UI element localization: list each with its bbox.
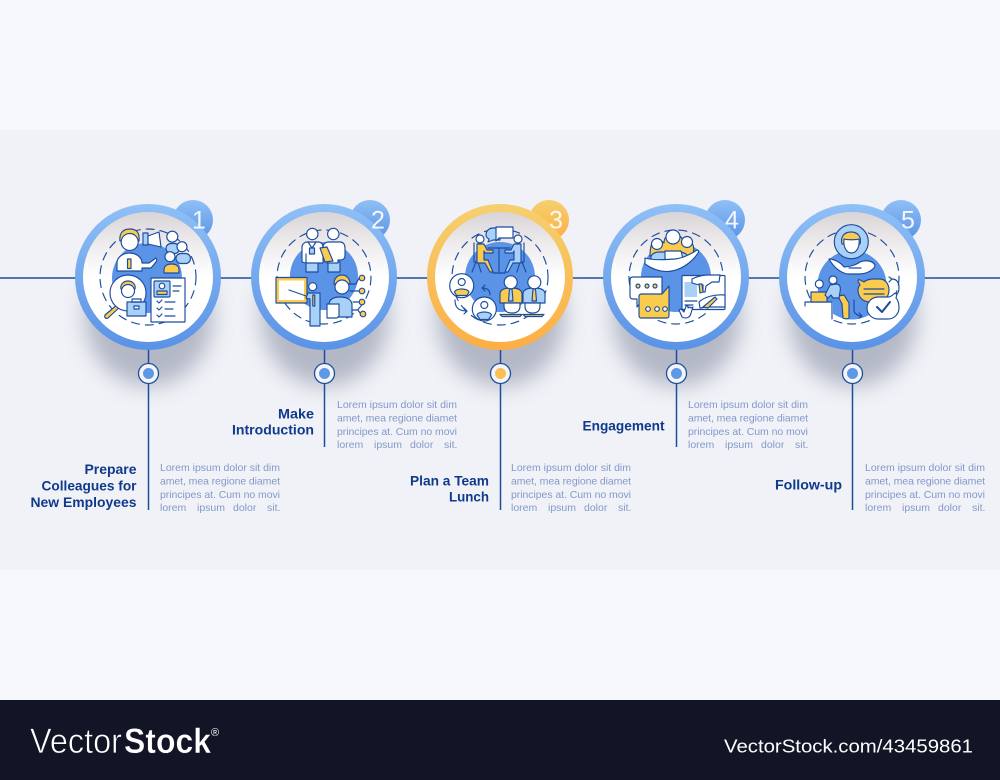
step 1 text: lorem [160, 502, 187, 514]
footer bar [0, 700, 1000, 780]
footer logo [30, 722, 219, 761]
step 3 text: principes at. Cum no movi [511, 489, 631, 501]
step 5 heading: Follow-up [775, 476, 842, 492]
step 2 text: sit. [444, 439, 457, 451]
icon: colleagues and hiring [100, 229, 196, 325]
step 4 heading: Engagement [582, 418, 665, 434]
step 1 heading: New Employees [30, 494, 137, 510]
step 2 heading [232, 406, 314, 438]
step 4 connector [676, 345, 678, 447]
step 5 shadow [789, 246, 917, 386]
step 5 inner disc [787, 212, 917, 342]
step 5 connector [852, 345, 854, 510]
step 4 [582, 200, 808, 451]
step 3 number badge [529, 200, 569, 240]
step 1 text: amet, mea regione diamet [160, 476, 280, 488]
step 2 number badge [350, 200, 390, 240]
step 3 number: 3 [549, 206, 563, 234]
step 4 number badge [705, 200, 745, 240]
step 4 text: principes at. Cum no movi [688, 426, 808, 438]
step 4 text: sit. [795, 439, 808, 451]
step 3 text: sit. [618, 502, 631, 514]
step 5 text [865, 462, 985, 514]
step 4 text: lorem [688, 439, 715, 451]
step 3 text: Lorem ipsum dolor sit dim [511, 462, 631, 474]
step 5 text: dolor [938, 502, 962, 514]
step 1 text: Lorem ipsum dolor sit dim [160, 462, 280, 474]
step 2 text: principes at. Cum no movi [337, 426, 457, 438]
step 4 number: 4 [725, 206, 739, 234]
step 2 text: ipsum [374, 439, 402, 451]
step 3 heading [410, 472, 489, 504]
step 1 number badge [173, 200, 213, 240]
step 5 text: ipsum [902, 502, 930, 514]
step 2 text: Lorem ipsum dolor sit dim [337, 399, 457, 411]
step 3 heading: Lunch [449, 488, 489, 504]
step 5 number badge [881, 200, 921, 240]
step 4 ring [603, 204, 749, 350]
step 3 connector [500, 345, 502, 510]
step 1 heading [30, 461, 137, 510]
step 5 text: principes at. Cum no movi [865, 489, 985, 501]
step 1 text: dolor [233, 502, 257, 514]
step 1 heading: Colleagues for [42, 478, 137, 494]
horizontal timeline [0, 277, 1000, 279]
step 3 text: dolor [584, 502, 608, 514]
step 4 text [688, 399, 808, 451]
step 1 text: sit. [267, 502, 280, 514]
step 3 [410, 200, 631, 514]
step 3 shadow [437, 246, 565, 386]
step 1 connector [148, 345, 150, 510]
footer image id: VectorStock.com/43459861 [724, 736, 973, 756]
step 1 node [138, 364, 158, 384]
footer logo: Stock [124, 722, 211, 761]
step 1 shadow [85, 246, 213, 386]
step 2 [232, 200, 457, 451]
step 4 text: ipsum [725, 439, 753, 451]
icon: team lunch [450, 227, 548, 325]
step 2 text: dolor [410, 439, 434, 451]
step 1 number: 1 [192, 206, 206, 234]
icon: engagement [629, 230, 725, 324]
icon: follow-up [805, 225, 899, 324]
step 3 inner disc [435, 212, 565, 342]
step 4 text: Lorem ipsum dolor sit dim [688, 399, 808, 411]
step 5 text: sit. [972, 502, 985, 514]
step 1 text: ipsum [197, 502, 225, 514]
step 1 text: principes at. Cum no movi [160, 489, 280, 501]
step 2 number: 2 [371, 206, 385, 234]
step 4 text: dolor [761, 439, 785, 451]
step 5 text: Lorem ipsum dolor sit dim [865, 462, 985, 474]
step 3 text [511, 462, 631, 514]
step 3 text: amet, mea regione diamet [511, 476, 631, 488]
step 5 node [842, 364, 862, 384]
step 2 text: amet, mea regione diamet [337, 412, 457, 424]
step 3 text: ipsum [548, 502, 576, 514]
step 1 ring [75, 204, 221, 350]
step 3 ring [427, 204, 573, 350]
step 1 inner disc [83, 212, 213, 342]
step 2 text: lorem [337, 439, 364, 451]
step 3 node [490, 364, 510, 384]
step 2 shadow [261, 246, 389, 386]
step 2 heading: Introduction [232, 422, 314, 438]
main band [0, 130, 1000, 570]
step 2 text [337, 399, 457, 451]
step 2 inner disc [259, 212, 389, 342]
step 5 [775, 200, 985, 514]
step 4 text: amet, mea regione diamet [688, 412, 808, 424]
step 1 text [160, 462, 280, 514]
icon: introductions [276, 228, 371, 326]
step 2 ring [251, 204, 397, 350]
step 1 [30, 200, 280, 514]
step 5 text: lorem [865, 502, 892, 514]
step 4 shadow [613, 246, 741, 386]
step 2 heading: Make [278, 406, 314, 422]
step 5 ring [779, 204, 925, 350]
page background top [0, 0, 1000, 130]
step 5 text: amet, mea regione diamet [865, 476, 985, 488]
page background bottom [0, 570, 1000, 700]
step 2 connector [324, 345, 326, 447]
footer logo: Vector [30, 722, 122, 761]
step 4 node [666, 364, 686, 384]
step 3 text: lorem [511, 502, 538, 514]
step 4 inner disc [611, 212, 741, 342]
step 1 heading: Prepare [84, 461, 137, 477]
step 2 node [314, 364, 334, 384]
footer logo: ® [211, 727, 219, 739]
step 5 number: 5 [901, 206, 915, 234]
step 3 heading: Plan a Team [410, 472, 489, 488]
